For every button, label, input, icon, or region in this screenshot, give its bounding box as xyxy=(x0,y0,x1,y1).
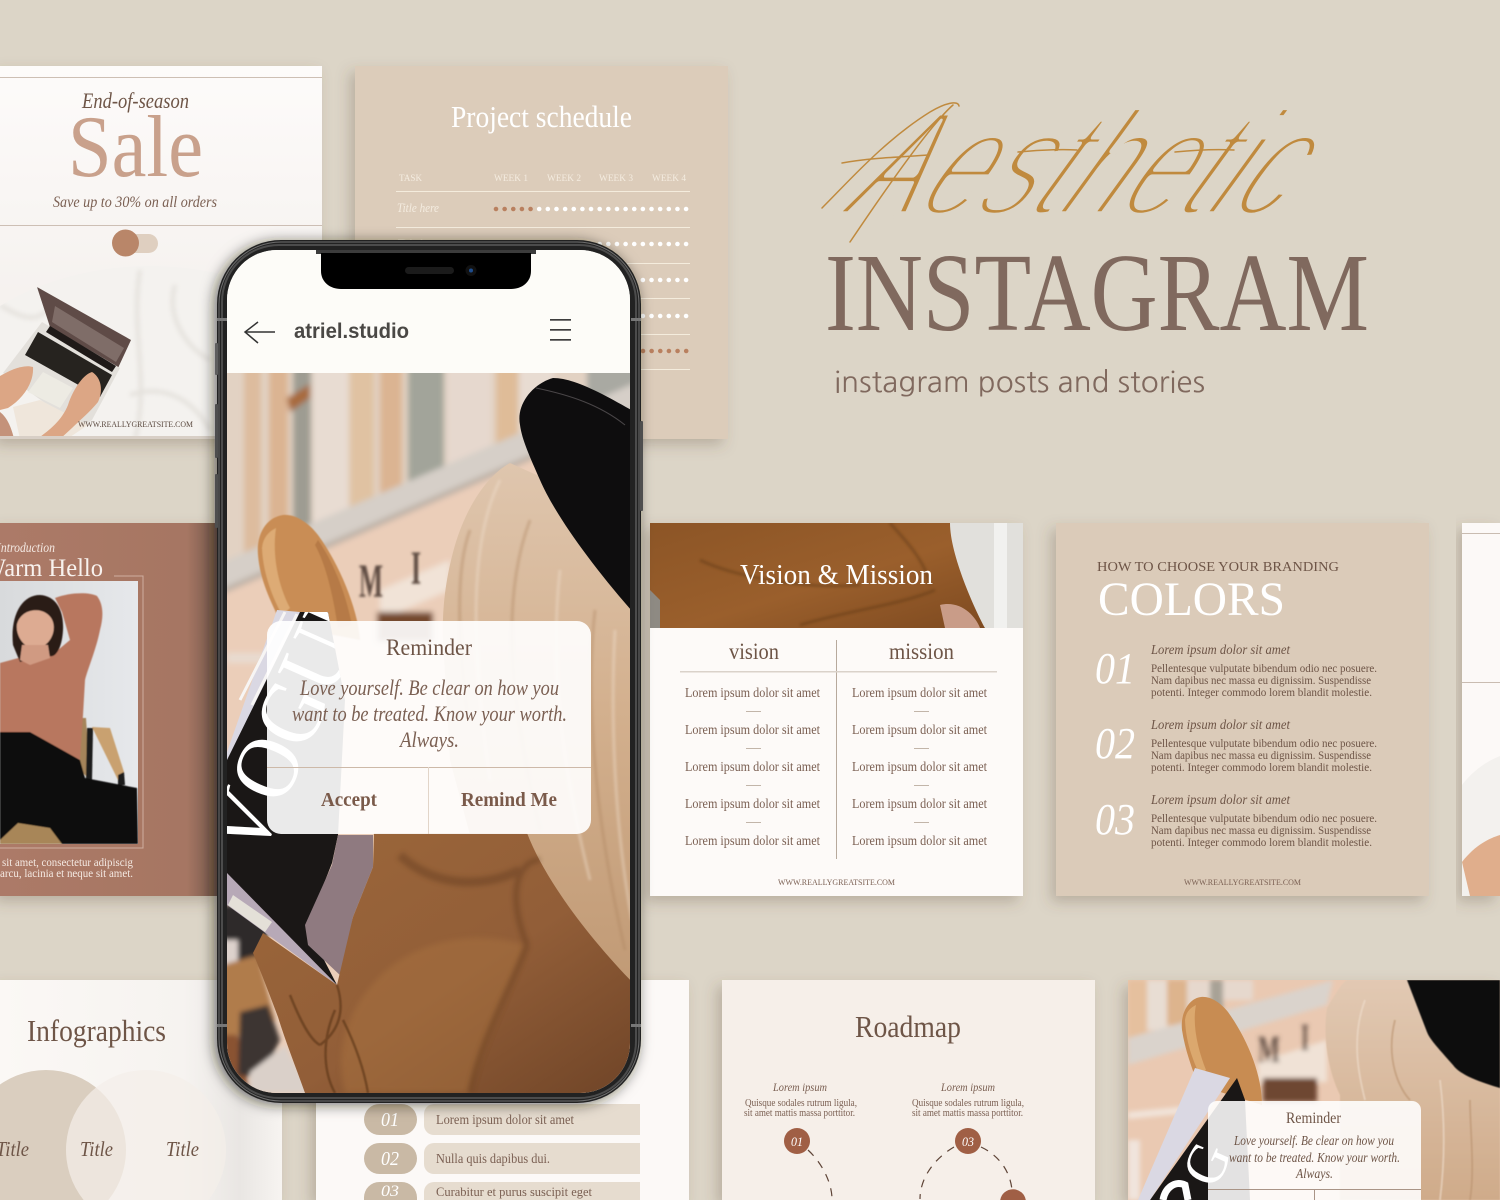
building background xyxy=(227,373,630,1093)
photo: woman on chair xyxy=(0,581,138,844)
card: reminder dialog: Love yourself. Be clear on how you xyxy=(299,675,559,700)
text: vision url: WWW.REALLYGREATSITE.COM xyxy=(778,878,895,887)
item 03: potenti. Integer commodo lorem blandit molestie. xyxy=(1151,835,1372,849)
list row 01: Lorem ipsum dolor sit amet xyxy=(436,1113,574,1128)
table rows xyxy=(396,191,690,370)
heading: project schedule: Project schedule xyxy=(451,99,632,134)
item 01: Nam dapibus nec massa eu dignissim. Suspendisse xyxy=(1151,673,1371,687)
list: vision items: Lorem ipsum dolor sit amet xyxy=(685,723,820,738)
coat xyxy=(253,833,640,1093)
roadmap path xyxy=(808,1147,1012,1199)
list: mission items xyxy=(852,686,987,849)
button: remind me: Remind Me xyxy=(461,789,557,811)
venn diagram: Title xyxy=(80,1137,113,1161)
item 01: Lorem ipsum dolor sit amet xyxy=(1150,643,1291,658)
item 02: Lorem ipsum dolor sit amet xyxy=(1150,718,1291,733)
heading: vision column: vision xyxy=(729,639,779,664)
text: intro body: sit amet, consectetur adipiscig xyxy=(2,857,133,869)
wall lettering xyxy=(358,550,422,599)
venn diagram: Title xyxy=(166,1137,199,1161)
card: reminder: Reminder xyxy=(1286,1110,1342,1127)
wall lettering: I xyxy=(411,542,421,595)
list: vision items xyxy=(685,686,820,849)
hat xyxy=(519,378,630,609)
item 03 xyxy=(1095,793,1377,849)
item 01: 01 xyxy=(1095,644,1135,693)
heading: Sale: Sale xyxy=(68,99,203,196)
magazine: VOGUE xyxy=(186,565,394,870)
list row 01 xyxy=(364,1104,640,1135)
roadmap step 01 xyxy=(744,1080,857,1119)
item 01: potenti. Integer commodo lorem blandit molestie. xyxy=(1151,685,1372,699)
photo: brown shirt xyxy=(650,523,1023,628)
panel: branding colors xyxy=(1056,523,1429,896)
photo: woman with baguette: M xyxy=(1258,1029,1280,1071)
panel: end-of-season sale xyxy=(0,66,322,440)
card: reminder: want to be treated. Know your worth. xyxy=(1229,1150,1400,1165)
roadmap step 03: Lorem ipsum xyxy=(940,1080,995,1094)
photo: woman with baguette: G xyxy=(1168,1132,1244,1195)
panel: roadmap xyxy=(722,980,1095,1200)
text: sale url: WWW.REALLYGREATSITE.COM xyxy=(78,420,193,429)
table header: WEEK 1 xyxy=(494,173,528,183)
photo: woman with baguette xyxy=(1128,980,1500,1200)
item 02: 02 xyxy=(1095,719,1135,768)
item 02 xyxy=(1095,718,1377,774)
icon: menu xyxy=(550,319,571,341)
list: mission items: Lorem ipsum dolor sit amet xyxy=(852,760,987,775)
list: mission items: Lorem ipsum dolor sit amet xyxy=(852,723,987,738)
item 02: Nam dapibus nec massa eu dignissim. Suspendisse xyxy=(1151,748,1371,762)
panel: reminder post xyxy=(1128,980,1500,1200)
heading: infographics: Infographics xyxy=(27,1013,166,1048)
photo: woman with baguette: I xyxy=(1301,1017,1309,1059)
photo frame xyxy=(0,576,143,848)
text: colors url: WWW.REALLYGREATSITE.COM xyxy=(1184,878,1301,887)
photo: laptop on bed xyxy=(0,270,215,439)
hair xyxy=(443,463,630,980)
table header: WEEK 2 xyxy=(547,173,581,183)
list row 03: Curabitur et purus suscipit eget xyxy=(436,1184,592,1199)
magazine xyxy=(227,610,345,985)
list: mission items: Lorem ipsum dolor sit amet xyxy=(852,686,987,701)
list row 02: Nulla quis dapibus dui. xyxy=(436,1152,550,1167)
roadmap step 03 xyxy=(912,1080,1024,1119)
table header: WEEK 4 xyxy=(652,173,687,183)
table header: TASK xyxy=(399,173,423,183)
heading: how to choose: HOW TO CHOOSE YOUR BRANDING xyxy=(1097,560,1339,575)
decorative swashes on the script title xyxy=(822,103,1234,242)
table header: WEEK 3 xyxy=(599,173,634,183)
heading: atriel.studio: atriel.studio xyxy=(294,320,409,343)
list: vision items: Lorem ipsum dolor sit amet xyxy=(685,797,820,812)
toggle icon xyxy=(112,230,158,256)
panel: numbered list xyxy=(316,980,689,1200)
heading: vision and mission: Vision & Mission xyxy=(740,559,933,591)
node 01 xyxy=(784,1128,810,1154)
panel: right edge post xyxy=(1462,523,1500,896)
list: mission items: Lorem ipsum dolor sit amet xyxy=(852,797,987,812)
node 04 xyxy=(1000,1189,1026,1200)
node 03 xyxy=(955,1128,981,1154)
wall lettering: M xyxy=(359,555,383,608)
heading: roadmap: Roadmap xyxy=(855,1009,961,1044)
photo: woman with baguette and magazine xyxy=(227,373,630,1093)
panel: vision and mission xyxy=(650,523,1023,896)
icon: back arrow xyxy=(245,322,275,343)
list row 02: 02 xyxy=(381,1148,399,1170)
panel: project schedule xyxy=(355,66,728,439)
card: reminder dialog: want to be treated. Know your worth. xyxy=(292,701,567,726)
heading: mission column: mission xyxy=(889,639,954,664)
subtitle: instagram posts and stories xyxy=(834,368,1205,397)
button: accept: Accept xyxy=(321,789,377,811)
item 03: 03 xyxy=(1095,795,1135,844)
list: mission items: Lorem ipsum dolor sit amet xyxy=(852,834,987,849)
text: intro body xyxy=(0,857,133,880)
roadmap step 01: Quisque sodales rutrum ligula, xyxy=(745,1097,857,1109)
heading: End-of-season: End-of-season xyxy=(81,88,189,113)
table rows: Title here xyxy=(397,200,439,215)
phone mockup xyxy=(186,240,660,1103)
panel: infographics xyxy=(0,980,282,1200)
venn diagram xyxy=(0,1070,226,1200)
title: INSTAGRAM: INSTAGRAM xyxy=(825,232,1369,355)
card: reminder xyxy=(1208,1101,1421,1200)
list: vision items: Lorem ipsum dolor sit amet xyxy=(685,760,820,775)
list: vision items: Lorem ipsum dolor sit amet xyxy=(685,686,820,701)
card: reminder dialog: Always. xyxy=(398,727,459,752)
node 01: 01 xyxy=(791,1134,803,1149)
item 02: Pellentesque vulputate bibendum odio nec posuere. xyxy=(1151,736,1377,750)
item 01: Pellentesque vulputate bibendum odio nec posuere. xyxy=(1151,661,1377,675)
list row 02 xyxy=(364,1143,640,1174)
text: intro body: arcu, lacinia et neque sit amet. xyxy=(0,868,133,880)
list row 01: 01 xyxy=(381,1109,399,1131)
list: vision items: Lorem ipsum dolor sit amet xyxy=(685,834,820,849)
roadmap step 03: Quisque sodales rutrum ligula, xyxy=(912,1097,1024,1109)
node 03: 03 xyxy=(962,1134,974,1149)
notch xyxy=(316,250,536,289)
phone screen xyxy=(227,250,630,1093)
heading: colors: COLORS xyxy=(1098,573,1285,626)
roadmap step 03: sit amet mattis massa porttitor. xyxy=(912,1107,1023,1119)
card: reminder dialog: Reminder xyxy=(386,635,472,660)
table rows: Title here xyxy=(397,236,439,251)
list row 03 xyxy=(364,1182,640,1200)
phone body xyxy=(215,240,643,1103)
item 03: Lorem ipsum dolor sit amet xyxy=(1150,793,1291,808)
table header xyxy=(399,173,687,183)
card: reminder: Always. xyxy=(1295,1166,1333,1181)
card: reminder: Love yourself. Be clear on how you xyxy=(1233,1133,1394,1148)
item 03: Pellentesque vulputate bibendum odio nec posuere. xyxy=(1151,811,1377,825)
list row 03: 03 xyxy=(381,1183,399,1200)
scarf xyxy=(305,835,373,977)
roadmap step 01: sit amet mattis massa porttitor. xyxy=(744,1107,855,1119)
item 01 xyxy=(1095,643,1377,699)
icon: baguette xyxy=(258,515,360,640)
panel: warm hello xyxy=(0,523,220,896)
roadmap step 01: Lorem ipsum xyxy=(772,1080,827,1094)
background figure lower-left xyxy=(227,905,304,1093)
text: discount: Save up to 30% on all orders xyxy=(53,194,217,211)
item 03: Nam dapibus nec massa eu dignissim. Suspendisse xyxy=(1151,823,1371,837)
item 02: potenti. Integer commodo lorem blandit molestie. xyxy=(1151,760,1372,774)
card: reminder dialog xyxy=(267,621,591,834)
